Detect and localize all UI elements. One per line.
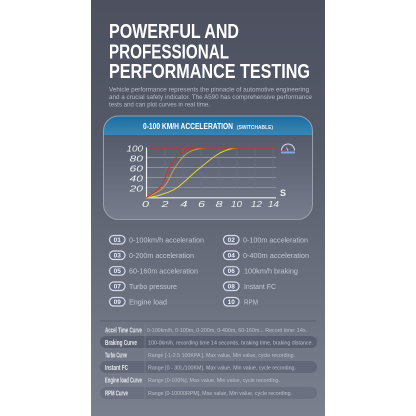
feature 05: 05	[114, 268, 121, 275]
y axis labels: 60	[130, 163, 143, 173]
unit label: S	[280, 188, 286, 198]
feature 01: 01	[114, 237, 121, 244]
curve: yellow	[146, 148, 238, 198]
x axis labels: 6	[198, 199, 205, 209]
feature 09: Engine load	[129, 298, 167, 306]
feature 10	[224, 298, 258, 306]
x axis labels	[142, 199, 279, 209]
row: accel time curve	[105, 326, 307, 334]
feature 09: 09	[114, 299, 121, 306]
x axis labels: 10	[231, 199, 242, 209]
feature 02: 0-100m acceleration	[243, 236, 308, 244]
title	[109, 21, 310, 83]
row: instant fc: Range [0 - 30L/100KM], Max value, Min value, cycle recording.	[148, 366, 296, 372]
x axis labels: 8	[216, 199, 223, 209]
feature 03: 03	[114, 252, 121, 260]
row: turbo curve: Range [-1-2.5 100KPA ], Max value, Min value, cycle recording.	[148, 353, 295, 359]
row: turbo curve: Turbo Curve	[105, 350, 127, 360]
feature list	[110, 236, 309, 306]
feature 01: 0-100km/h acceleration	[129, 236, 204, 244]
title: PROFESSIONAL	[109, 42, 229, 64]
row: engine load curve	[105, 376, 280, 384]
row: turbo curve	[105, 350, 295, 360]
feature 05: 60-160m acceleration	[129, 267, 198, 276]
line chart	[126, 143, 286, 209]
axes	[146, 148, 276, 198]
feature 02: 02	[228, 237, 235, 244]
feature 09	[110, 298, 167, 306]
feature 06: 100km/h braking	[244, 267, 298, 276]
feature 08	[224, 282, 276, 291]
title: PERFORMANCE TESTING	[109, 61, 310, 83]
intro text: Vehicle performance represents the pinnacle of automotive engineering	[109, 86, 309, 94]
chart header	[103, 116, 313, 135]
100 line	[147, 147, 276, 149]
feature 07	[110, 282, 177, 291]
feature 10: RPM	[244, 298, 258, 306]
feature 03: 0-200m acceleration	[129, 251, 194, 260]
y axis labels: 40	[130, 173, 143, 183]
feature 04: 04	[228, 252, 235, 260]
y axis labels: 80	[130, 153, 143, 163]
row: rpm curve: Range [0-10000RPM], Max value, Min value, cycle recording.	[148, 391, 292, 397]
panel: background	[91, 0, 325, 416]
chart header: 0-100 KM/H ACCELERATION	[143, 122, 233, 131]
x axis labels: 14	[268, 199, 279, 209]
curve: red	[146, 148, 190, 198]
row: braking curve: Braking Curve	[105, 338, 137, 347]
x axis labels: 4	[180, 199, 188, 209]
chart header: (SWITCHABLE)	[237, 125, 273, 131]
row: engine load curve: Range [0-100%], Max value, Min value, cycle recording.	[148, 378, 280, 384]
curve table	[100, 321, 317, 399]
icon: speedometer	[281, 144, 295, 154]
intro text	[109, 86, 312, 108]
row: rpm curve	[100, 387, 317, 399]
row: accel time curve: Accel Time Curve	[105, 326, 142, 334]
y axis labels: 100	[126, 143, 143, 153]
title: POWERFUL AND	[109, 21, 239, 43]
x axis labels: 0	[142, 199, 149, 209]
row: rpm curve: RPM Curve	[105, 388, 128, 398]
x axis labels: 12	[251, 199, 262, 209]
chart card	[103, 116, 313, 220]
feature 06: 06	[228, 268, 235, 275]
y axis labels	[126, 143, 143, 193]
feature 10: 10	[228, 299, 235, 306]
feature 04: 0-400m acceleration	[243, 251, 309, 260]
row: engine load curve: Engine load Curve	[105, 376, 142, 384]
feature 07: 07	[114, 284, 121, 290]
row: instant fc	[100, 361, 317, 373]
row: instant fc: Instant FC	[105, 363, 128, 372]
curve: orange	[146, 148, 208, 198]
feature 08: Instant FC	[244, 282, 276, 291]
row: braking curve	[100, 336, 317, 348]
y axis labels: 20	[128, 183, 143, 193]
row: accel time curve: 0-100km/h, 0-100m, 0-200m, 0-400m, 60-160m... Record time: 14s.	[147, 328, 307, 334]
feature 08: 08	[228, 284, 235, 290]
x axis labels: 2	[160, 199, 169, 209]
intro text: and a crucial safety indicator. The A590 has comprehensive performance	[109, 94, 312, 101]
intro text: tests and can plot curves in real time.	[109, 102, 210, 108]
feature 07: Turbo pressure	[129, 282, 177, 291]
row: braking curve: 100-0km/h, recording time 14 seconds, braking time, braking distance.	[148, 340, 313, 346]
